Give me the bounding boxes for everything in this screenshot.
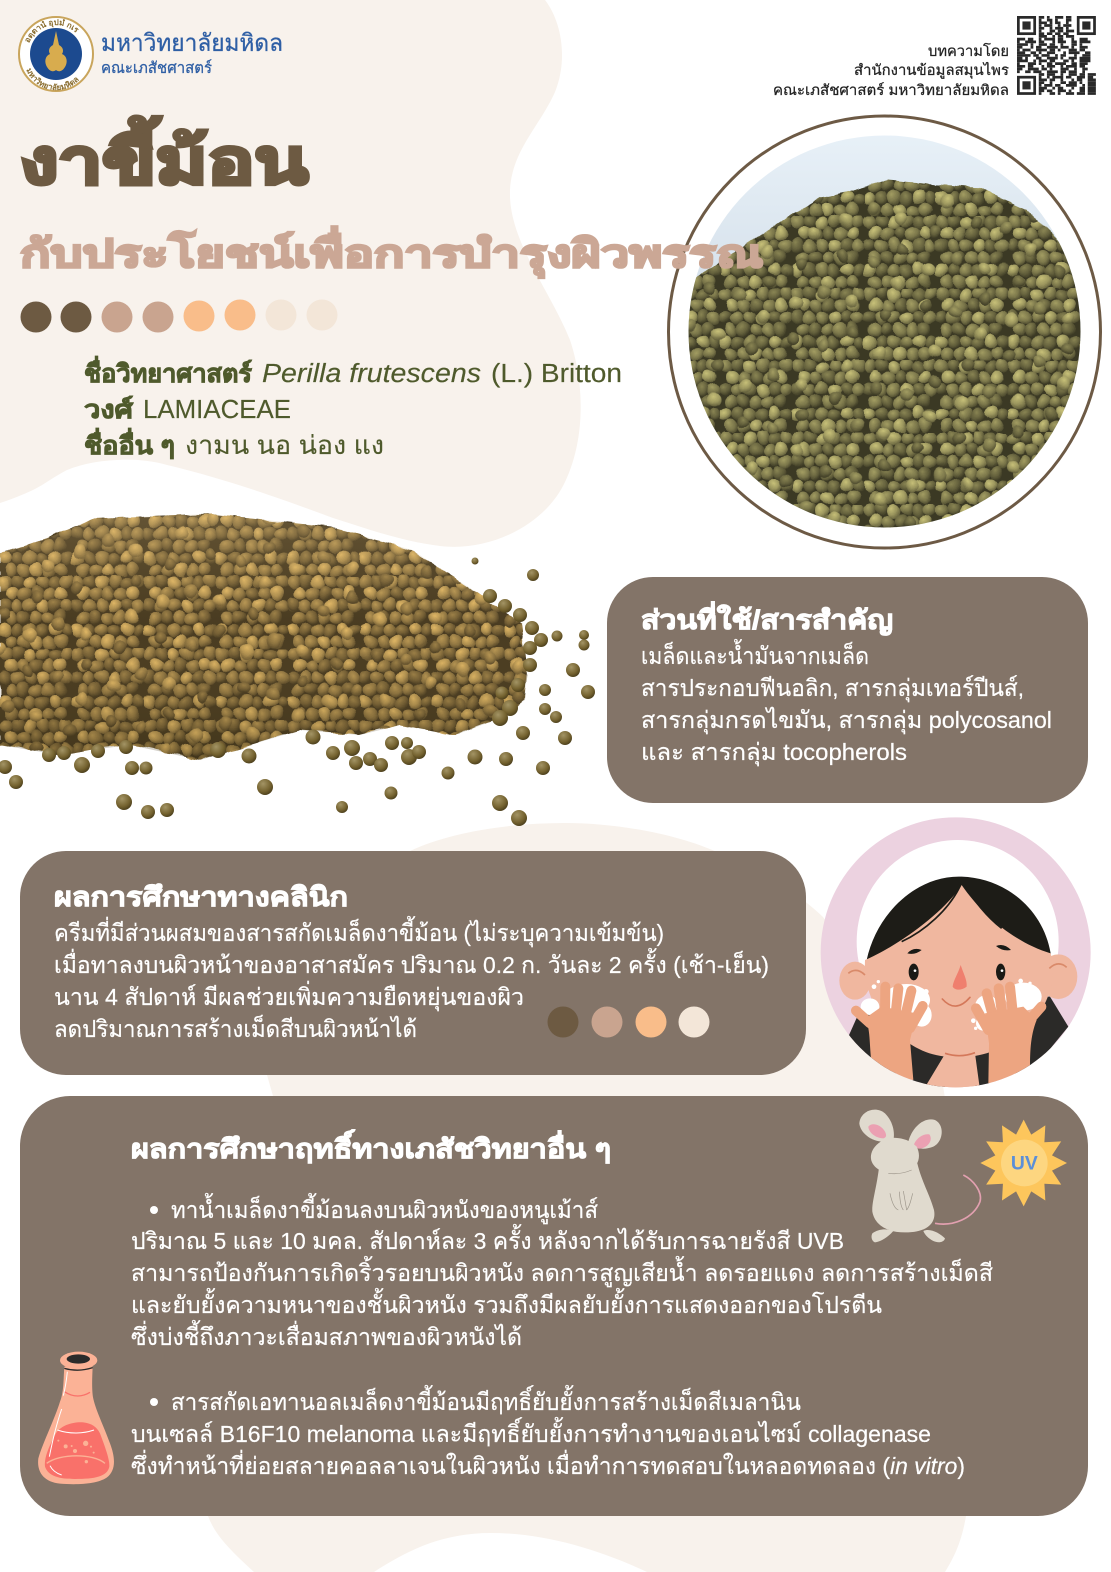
university name: [101, 30, 283, 77]
paragraph: mouse skin study: สามารถป้องกันการเกิดริ้วรอยบนผิวหนัง ลดการสูญเสียน้ำ ลดรอยแดง ลดการสร้างเม็ดสี: [131, 1256, 993, 1288]
panel: parts used and key compounds: สารประกอบฟีนอลิก, สารกลุ่มเทอร์ปีนส์,: [641, 675, 1024, 702]
botanical information: ชื่อวิทยาศาสตร์: [84, 356, 253, 388]
botanical information: LAMIACEAE: [143, 396, 291, 424]
panel: clinical study results: นาน 4 สัปดาห์ มีผลช่วยเพิ่มความยืดหยุ่นของผิว: [54, 980, 524, 1011]
university name: คณะเภสัชศาสตร์: [101, 59, 212, 77]
logo: Mahidol University seal: อตฺตานํ อุปมํ กเร: [26, 19, 79, 43]
panel: clinical study results: เมื่อทาลงบนผิวหน้าของอาสาสมัคร ปริมาณ 0.2 ก. วันละ 2 ครั้ง (เช้า-เย็น): [54, 948, 769, 978]
background blob: top left: [0, 0, 581, 547]
heading: pharmacological results: ผลการศึกษาฤทธิ์ทางเภสัชวิทยาอื่น ๆ: [131, 1129, 611, 1164]
panel: parts used and key compounds: สารกลุ่มกรดไขมัน, สารกลุ่ม polycosanol: [641, 707, 1052, 734]
panel: clinical study results: ลดปริมาณการสร้างเม็ดสีบนผิวหน้าได้: [54, 1014, 417, 1042]
paragraph: mouse skin study: ทาน้ำเมล็ดงาขี้ม้อนลงบนผิวหนังของหนูเม้าส์: [171, 1193, 598, 1225]
article credit: บทความโดย: [928, 42, 1009, 60]
logo: Mahidol University seal: [18, 16, 94, 92]
panel: clinical study results: [20, 851, 806, 1075]
botanical information: (L.) Britton: [491, 360, 622, 388]
panel: parts used and key compounds: และ สารกลุ่ม tocopherols: [641, 739, 907, 766]
heading: clinical results: ผลการศึกษาทางคลินิก: [54, 882, 348, 912]
paragraph: mouse skin study: ซึ่งบ่งชี้ถึงภาวะเสื่อมสภาพของผิวหนังได้: [131, 1320, 522, 1350]
hands: [856, 987, 1041, 1030]
title: งาขี้ม้อน: [20, 116, 308, 197]
botanical information: ชื่ออื่น ๆ: [84, 428, 175, 460]
paragraph: in vitro study: บนเซลล์ B16F10 melanoma และมีฤทธิ์ยับยั้งการทำงานของเอนไซม์ collagenase: [131, 1416, 931, 1447]
icon: girl washing her face: [821, 817, 1091, 1090]
background blob: centre: [267, 823, 947, 1110]
paragraph: mouse skin study: และยับยั้งความหนาของชั้นผิวหนัง รวมถึงมีผลยับยั้งการแสดงออกของโปรตีน: [131, 1288, 882, 1318]
article credit: สำนักงานข้อมูลสมุนไพร: [854, 61, 1009, 79]
subtitle: กับประโยชน์เพื่อการบำรุงผิวพรรณ: [20, 226, 763, 278]
panel: other pharmacological study results: [20, 1096, 1088, 1516]
article credit: [773, 42, 1009, 99]
panel: parts used and key compounds: [607, 577, 1088, 803]
article credit: คณะเภสัชศาสตร์ มหาวิทยาลัยมหิดล: [773, 82, 1009, 99]
heading: parts used: ส่วนที่ใช้/สารสำคัญ: [641, 601, 893, 636]
logo: Mahidol University seal: มหาวิทยาลัยมหิดล: [26, 68, 79, 90]
paragraph: in vitro study: สารสกัดเอทานอลเมล็ดงาขี้ม้อนมีฤทธิ์ยับยั้งการสร้างเม็ดสีเมลานิน: [171, 1384, 801, 1415]
paragraph: in vitro study: ซึ่งทำหน้าที่ย่อยสลายคอลลาเจนในผิวหนัง เมื่อทำการทดสอบในหลอดทดลอง (in vitro): [131, 1449, 965, 1479]
paragraph: mouse skin study: ปริมาณ 5 และ 10 มคล. สัปดาห์ละ 3 ครั้ง หลังจากได้รับการฉายรังสี UVB: [131, 1224, 844, 1254]
photo: perilla seeds in circle: [668, 116, 1100, 548]
background blob: bottom: [208, 1516, 966, 1572]
botanical information: Perilla frutescens: [262, 360, 481, 388]
paragraph: mouse skin study: [131, 1193, 993, 1350]
icon: UV sun: UV: [1011, 1154, 1038, 1175]
colour dots row: [20, 300, 338, 332]
icon: UV sun: [980, 1120, 1067, 1206]
colour dots: [548, 1006, 710, 1038]
icon: mouse: [859, 1110, 980, 1242]
icon: laboratory flask: [38, 1352, 114, 1484]
university name: มหาวิทยาลัยมหิดล: [101, 30, 283, 57]
botanical information: งามน นอ น่อง แง: [185, 432, 384, 460]
photo: pile of perilla seeds: [0, 514, 595, 826]
QR code: [1017, 17, 1096, 94]
botanical information: [84, 356, 622, 460]
botanical information: วงศ์: [84, 395, 134, 424]
foam: [861, 979, 1042, 1031]
panel: parts used and key compounds: เมล็ดและน้ำมันจากเมล็ด: [641, 639, 869, 669]
panel: clinical study results: ครีมที่มีส่วนผสมของสารสกัดเมล็ดงาขี้ม้อน (ไม่ระบุความเข้มข้น): [54, 916, 664, 947]
paragraph: in vitro study: [131, 1384, 965, 1479]
